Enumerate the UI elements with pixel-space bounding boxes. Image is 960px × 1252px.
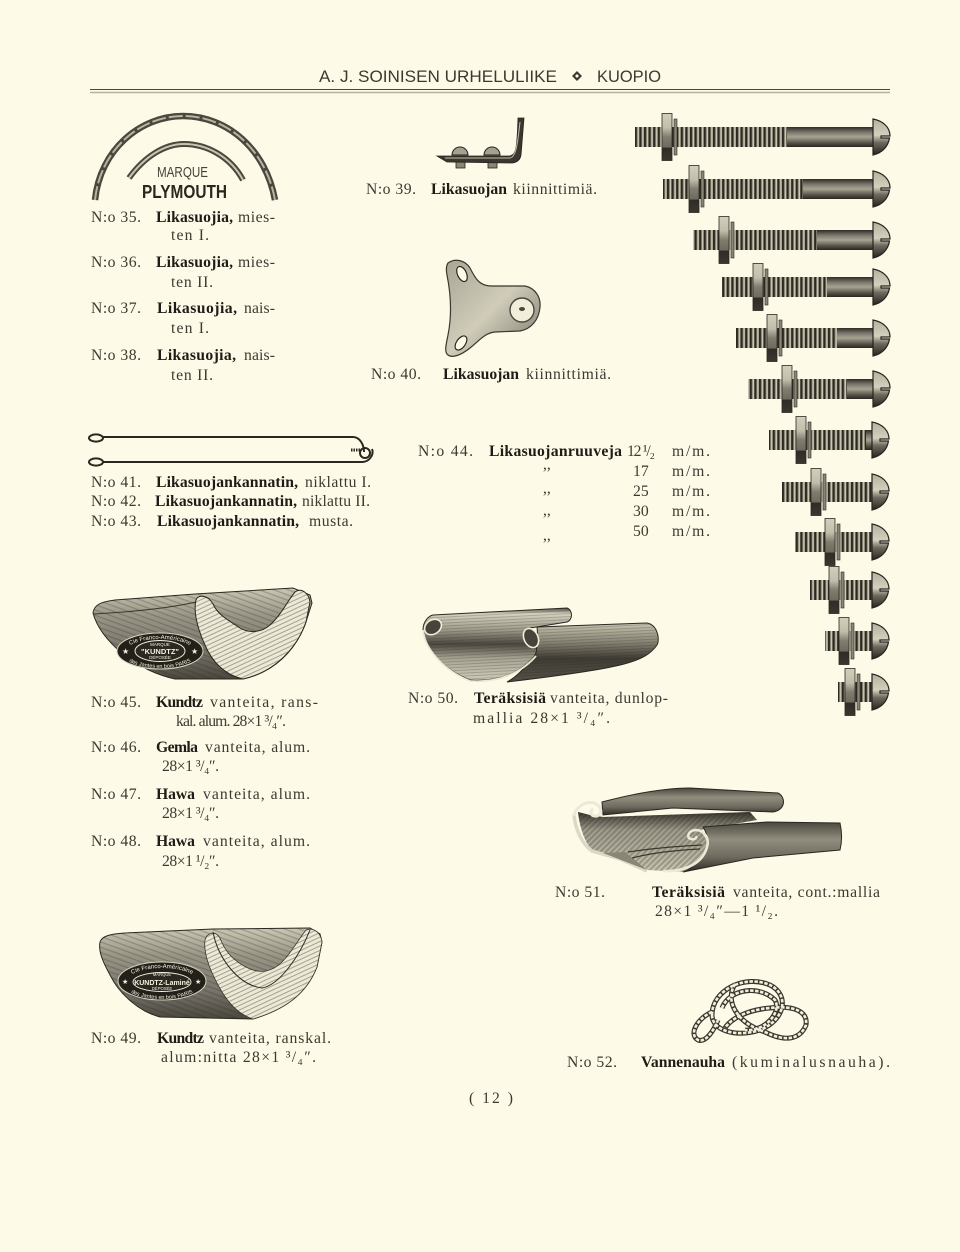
- text block: item 52: [567, 1054, 890, 1071]
- text block: items 35-38: ten II.: [171, 274, 213, 291]
- text block: item 51: N:o 51.: [555, 884, 605, 901]
- table: item 44 screw sizes: m/m.: [672, 503, 710, 520]
- text block: item 52: N:o 52.: [567, 1054, 617, 1071]
- table: item 44 screw sizes: 17: [633, 463, 649, 480]
- caption: item 39: [366, 181, 597, 198]
- text block: items 45-48: Kundtz: [156, 694, 203, 711]
- text block: items 41-43: musta.: [309, 513, 353, 530]
- text block: items 45-48: Gemla: [156, 739, 198, 756]
- table: item 44 screw sizes: 50: [633, 523, 649, 540]
- illustration: Kundtz laminated rim 49: MARQUE: [153, 972, 171, 977]
- text block: items 45-48: N:o 45.: [91, 694, 141, 711]
- illustration: Kundtz laminated rim 49: des Jantes en bois PARIS: [132, 990, 192, 999]
- text block: items 45-48: [91, 694, 318, 870]
- illustration: Kundtz wooden rim 45: "KUNDTZ": [141, 647, 179, 656]
- text block: item 49: N:o 49.: [91, 1030, 141, 1047]
- illustration: bracket 39: [437, 118, 524, 168]
- text block: item 50: N:o 50.: [408, 690, 458, 707]
- text block: items 35-38: mies-: [238, 254, 275, 271]
- text block: items 41-43: niklattu II.: [302, 493, 370, 510]
- table: item 44 screw sizes: m/m.: [672, 483, 710, 500]
- illustration: screws 10: [810, 566, 889, 614]
- illustration: screws 7: [769, 416, 889, 464]
- caption: item 40: kiinnittimiä.: [526, 366, 611, 383]
- text block: items 35-38: N:o 36.: [91, 254, 141, 271]
- text block: items 41-43: [91, 474, 371, 530]
- table: item 44 screw sizes: ,,: [543, 456, 551, 473]
- text block: item 49: [91, 1030, 331, 1066]
- illustration: Kundtz laminated rim 49: ★: [122, 978, 128, 986]
- text block: items 35-38: Likasuojia,: [156, 209, 233, 226]
- text block: items 41-43: N:o 43.: [91, 513, 141, 530]
- illustration: Kundtz wooden rim 45: DÉPOSÉE: [149, 654, 171, 660]
- page number: ( 12 ): [469, 1090, 513, 1107]
- illustration: plate bracket 40: [446, 260, 540, 356]
- text block: items 41-43: Likasuojankannatin,: [155, 493, 297, 510]
- text block: item 51: Teräksisiä: [652, 884, 725, 901]
- illustration: Kundtz laminated rim 49: [99, 928, 322, 1020]
- table: item 44 screw sizes: ,,: [543, 502, 551, 519]
- table: item 44 screw sizes: m/m.: [672, 443, 710, 460]
- text block: items 35-38: Likasuojia,: [156, 254, 233, 271]
- text block: item 51: [555, 884, 880, 920]
- table: item 44 screw sizes: 12 ¹/₂: [627, 443, 655, 460]
- illustration: Kundtz wooden rim 45: MARQUE: [150, 642, 170, 647]
- text block: items 45-48: N:o 48.: [91, 833, 141, 850]
- text block: items 35-38: ten I.: [171, 320, 209, 337]
- text block: item 50: vanteita, dunlop-: [550, 690, 668, 707]
- table: item 44 screw sizes: ,,: [543, 480, 551, 497]
- illustration: Kundtz wooden rim 45: Cie Franco-Américaine: [129, 634, 191, 645]
- text block: items 45-48: 28×1 ³/₄″.: [162, 758, 219, 775]
- text block: item 50: mallia 28×1 ³/₄″.: [473, 710, 610, 727]
- text block: item 52: Vannenauha: [641, 1054, 725, 1071]
- illustration: Kundtz wooden rim 45: des Jantes en bois PARIS: [130, 658, 190, 668]
- text block: items 35-38: ten II.: [171, 367, 213, 384]
- table: item 44 screw sizes: 25: [633, 483, 649, 500]
- text block: items 35-38: Likasuojia,: [157, 347, 236, 364]
- illustration: Kundtz wooden rim 45: [92, 588, 312, 680]
- table: item 44 screw sizes: [418, 443, 710, 544]
- caption: item 39: Likasuojan: [431, 181, 507, 198]
- illustration: Dunlop steel rim 50: [422, 608, 658, 682]
- illustration: Plymouth mudguards: PLYMOUTH: [142, 182, 227, 202]
- illustration: screws 11: [825, 618, 889, 664]
- text block: items 45-48: 28×1 ¹/₂″.: [162, 853, 219, 870]
- text block: items 35-38: nais-: [244, 300, 275, 317]
- table: item 44 screw sizes: Likasuojanruuveja: [489, 443, 622, 460]
- illustration: screws 2: [663, 166, 890, 212]
- illustration: Kundtz wooden rim 45: ★: [191, 647, 198, 656]
- illustration: Kundtz wooden rim 45: ★: [122, 647, 129, 656]
- text block: items 45-48: 28×1 ³/₄″.: [162, 805, 219, 822]
- illustration: screws 1: [635, 114, 890, 160]
- text block: items 41-43: N:o 42.: [91, 493, 141, 510]
- illustration: screws 3: [693, 216, 890, 264]
- text block: items 45-48: vanteita, rans-: [210, 694, 318, 711]
- text block: items 35-38: ten I.: [171, 227, 209, 244]
- text block: items 45-48: N:o 46.: [91, 739, 141, 756]
- text block: items 45-48: kal. alum. 28×1 ³/₄″.: [176, 713, 286, 730]
- illustration: Kundtz laminated rim 49: DÉPOSÉE: [152, 986, 172, 991]
- text block: items 45-48: Hawa: [156, 786, 195, 803]
- illustration: Plymouth mudguards: [95, 116, 275, 202]
- illustration: screws 6: [748, 366, 890, 412]
- header: KUOPIO: [597, 67, 661, 86]
- text block: items 35-38: nais-: [244, 347, 275, 364]
- text block: items 41-43: niklattu I.: [305, 474, 371, 491]
- text block: items 41-43: Likasuojankannatin,: [157, 513, 299, 530]
- text block: item 49: alum:nitta 28×1 ³/₄″.: [161, 1049, 316, 1066]
- text block: items 35-38: Likasuojia,: [157, 300, 237, 317]
- text block: item 49: Kundtz: [157, 1030, 204, 1047]
- text block: item 50: Teräksisiä: [474, 690, 546, 707]
- text block: items 35-38: N:o 37.: [91, 300, 141, 317]
- illustration: screws 12: [838, 668, 889, 716]
- text block: items 35-38: mies-: [238, 209, 275, 226]
- text block: item 52: (kuminalusnauha).: [732, 1054, 890, 1071]
- header: A. J. SOINISEN URHELULIIKE: [319, 67, 557, 86]
- caption: item 40: N:o 40.: [371, 366, 421, 383]
- table: item 44 screw sizes: N:o 44.: [418, 443, 473, 460]
- illustration: Kundtz laminated rim 49: Cie Franco-Américaine: [131, 964, 193, 974]
- text block: items 41-43: N:o 41.: [91, 474, 141, 491]
- text block: items 35-38: N:o 38.: [91, 347, 141, 364]
- illustration: screws 9: [795, 518, 889, 566]
- text block: items 45-48: Hawa: [156, 833, 195, 850]
- illustration: Kundtz laminated rim 49: KUNDTZ-Laminé: [134, 980, 190, 987]
- illustration: screws 4: [722, 264, 890, 310]
- illustration: mudguard stay wire: [89, 434, 373, 466]
- illustration: steel rim 51: [574, 788, 842, 872]
- table: item 44 screw sizes: ,,: [543, 527, 551, 544]
- caption: item 40: Likasuojan: [443, 366, 519, 383]
- text block: items 35-38: N:o 35.: [91, 209, 141, 226]
- text block: item 51: vanteita, cont.:mallia: [733, 884, 880, 901]
- table: item 44 screw sizes: m/m.: [672, 463, 710, 480]
- caption: item 39: N:o 39.: [366, 181, 416, 198]
- text block: item 49: vanteita, ranskal.: [209, 1030, 331, 1047]
- text block: item 51: 28×1 ³/₄″—1 ¹/₂.: [655, 903, 778, 920]
- text block: items 35-38: [91, 209, 275, 384]
- illustration: Kundtz laminated rim 49: ★: [195, 978, 201, 986]
- header: [90, 67, 890, 92]
- illustration: Plymouth mudguards: MARQUE: [157, 164, 208, 181]
- illustration: screws 8: [782, 468, 889, 516]
- table: item 44 screw sizes: 30: [633, 503, 649, 520]
- text block: item 50: [408, 690, 668, 727]
- caption: item 39: kiinnittimiä.: [513, 181, 597, 198]
- text block: items 41-43: Likasuojankannatin,: [156, 474, 298, 491]
- text block: items 45-48: vanteita, alum.: [205, 739, 310, 756]
- text block: items 45-48: N:o 47.: [91, 786, 141, 803]
- text block: items 45-48: vanteita, alum.: [203, 833, 310, 850]
- caption: item 40: [371, 366, 611, 383]
- illustration: screws 5: [736, 314, 890, 362]
- text block: items 45-48: vanteita, alum.: [203, 786, 310, 803]
- illustration: coiled rim rope: [694, 981, 806, 1040]
- table: item 44 screw sizes: m/m.: [672, 523, 710, 540]
